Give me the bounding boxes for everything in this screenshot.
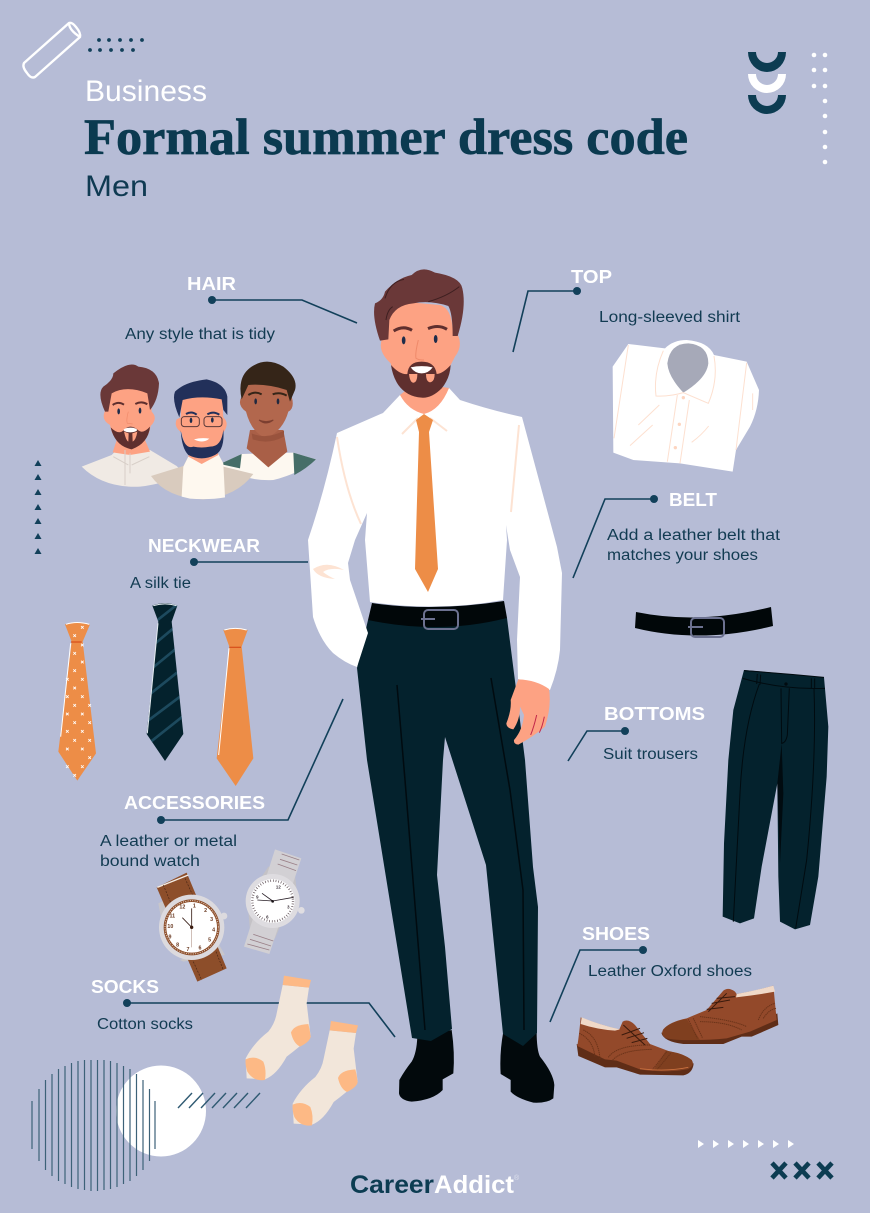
watch: leather strap: 4: [212, 927, 215, 933]
watch: metal bracelet: 12: [276, 885, 281, 890]
watch: leather strap: 12: [179, 904, 185, 910]
accessories leader line: [157, 699, 343, 824]
watch: leather strap: 3: [210, 917, 213, 923]
watch: leather strap: 8: [176, 943, 179, 949]
hair leader line: [208, 296, 357, 323]
man: buckle: [421, 610, 458, 629]
illustration: man figure: [308, 269, 562, 1103]
heading: Business: Business: [85, 75, 207, 108]
socks text: Cotton socks: [97, 1016, 193, 1033]
man: shoes: [399, 1030, 554, 1103]
watches: [157, 849, 305, 982]
watch: metal bracelet: 6: [266, 915, 269, 920]
watch: leather strap: 9: [169, 935, 172, 941]
socks heading: SOCKS: [91, 977, 159, 997]
heading: Men: Men: [85, 170, 148, 203]
hair text: Any style that is tidy: [125, 326, 275, 343]
logo: CareerAddict: Career: [350, 1171, 434, 1199]
man: trousers: [357, 618, 538, 1046]
man: head: [374, 269, 464, 398]
decoration: hatch marks: [178, 1093, 260, 1108]
socks leader line: [123, 999, 395, 1037]
accessories text: bound watch: [100, 853, 200, 870]
logo: CareerAddict: ®: [514, 1174, 520, 1182]
watch: metal bracelet: [244, 849, 305, 954]
top heading: TOP: [571, 267, 612, 287]
decoration: white triangles: [698, 1140, 794, 1148]
bottoms text: Suit trousers: [603, 746, 698, 763]
logo: CareerAddict: [350, 1171, 520, 1199]
panel: top: [513, 267, 759, 472]
accessories text: A leather or metal: [100, 833, 237, 850]
socks icon: [246, 976, 358, 1126]
decoration: striped circle: [32, 1060, 155, 1191]
watch: metal bracelet: 3: [287, 905, 290, 910]
watch: leather strap: 11: [170, 914, 175, 920]
belt icon: [635, 607, 773, 637]
sock: left: [246, 976, 311, 1080]
decoration: outlined tube: [23, 23, 80, 77]
panel: belt: [573, 490, 781, 637]
shoes icon: [577, 986, 778, 1075]
man: shirt shading: [313, 418, 519, 579]
shoes heading: SHOES: [582, 924, 650, 944]
man: trouser creases: [397, 678, 524, 1030]
man: shirt: [308, 388, 562, 690]
decoration: triangles column: [34, 460, 42, 554]
decoration: dark dot rows: [88, 38, 144, 52]
hair heading: HAIR: [187, 274, 236, 294]
panel: hair: [82, 274, 357, 499]
watch: leather strap: 1: [193, 903, 196, 909]
top text: Long-sleeved shirt: [599, 309, 741, 326]
title: Formal summer dress code: [84, 110, 688, 166]
top leader line: [513, 287, 581, 352]
folded shirt icon: [613, 340, 759, 472]
accessories text: [100, 833, 237, 870]
panel: shoes: [550, 924, 778, 1075]
shoes text: Leather Oxford shoes: [588, 963, 752, 980]
watch: leather strap: 10: [167, 924, 173, 930]
man: hand: [506, 679, 550, 745]
shoes leader line: [550, 946, 647, 1022]
watch: leather strap: 2: [204, 908, 207, 914]
tie: patterned orange: [58, 622, 96, 781]
tie: striped navy: [147, 603, 187, 761]
neckwear heading: NECKWEAR: [148, 536, 260, 556]
decoration: crescents: [748, 52, 786, 114]
trousers icon: [723, 670, 828, 929]
belt leader line: [573, 495, 658, 578]
watch: metal bracelet: 9: [256, 894, 259, 899]
belt text: Add a leather belt that: [607, 527, 781, 544]
hairstyle faces: [82, 362, 316, 499]
neckwear leader line: [190, 558, 308, 566]
panel: accessories: [100, 699, 343, 982]
face: brown-haired man: [82, 364, 184, 487]
sock: right: [293, 1021, 358, 1126]
bottoms heading: BOTTOMS: [604, 704, 705, 724]
watch: leather strap: 5: [208, 938, 211, 944]
man: tie: [415, 414, 438, 592]
shoe: front: [577, 1017, 694, 1075]
man: neck: [400, 383, 449, 414]
belt text: [607, 527, 781, 564]
logo: CareerAddict: Addict: [434, 1171, 515, 1199]
bottoms leader line: [568, 727, 629, 761]
watch: leather strap: [157, 873, 227, 982]
belt heading: BELT: [669, 490, 717, 510]
panel: bottoms: [568, 670, 828, 929]
decoration: white circle: [116, 1066, 206, 1156]
panel: neckwear: [58, 536, 308, 786]
face: dark-haired man: [220, 362, 316, 480]
panel: socks: [91, 976, 395, 1126]
decoration: white dot column: [812, 53, 827, 164]
watch: leather strap: 6: [199, 945, 202, 951]
shoe: back: [661, 986, 778, 1044]
face: navy-haired man with glasses: [151, 379, 253, 499]
tie: plain orange: [217, 628, 253, 786]
ties: [58, 603, 253, 786]
belt text: matches your shoes: [607, 547, 758, 564]
watch: leather strap: 7: [187, 947, 190, 953]
man: belt: [368, 601, 507, 627]
decoration: cross marks: [772, 1163, 832, 1178]
accessories heading: ACCESSORIES: [124, 793, 265, 813]
neckwear text: A silk tie: [130, 575, 191, 592]
